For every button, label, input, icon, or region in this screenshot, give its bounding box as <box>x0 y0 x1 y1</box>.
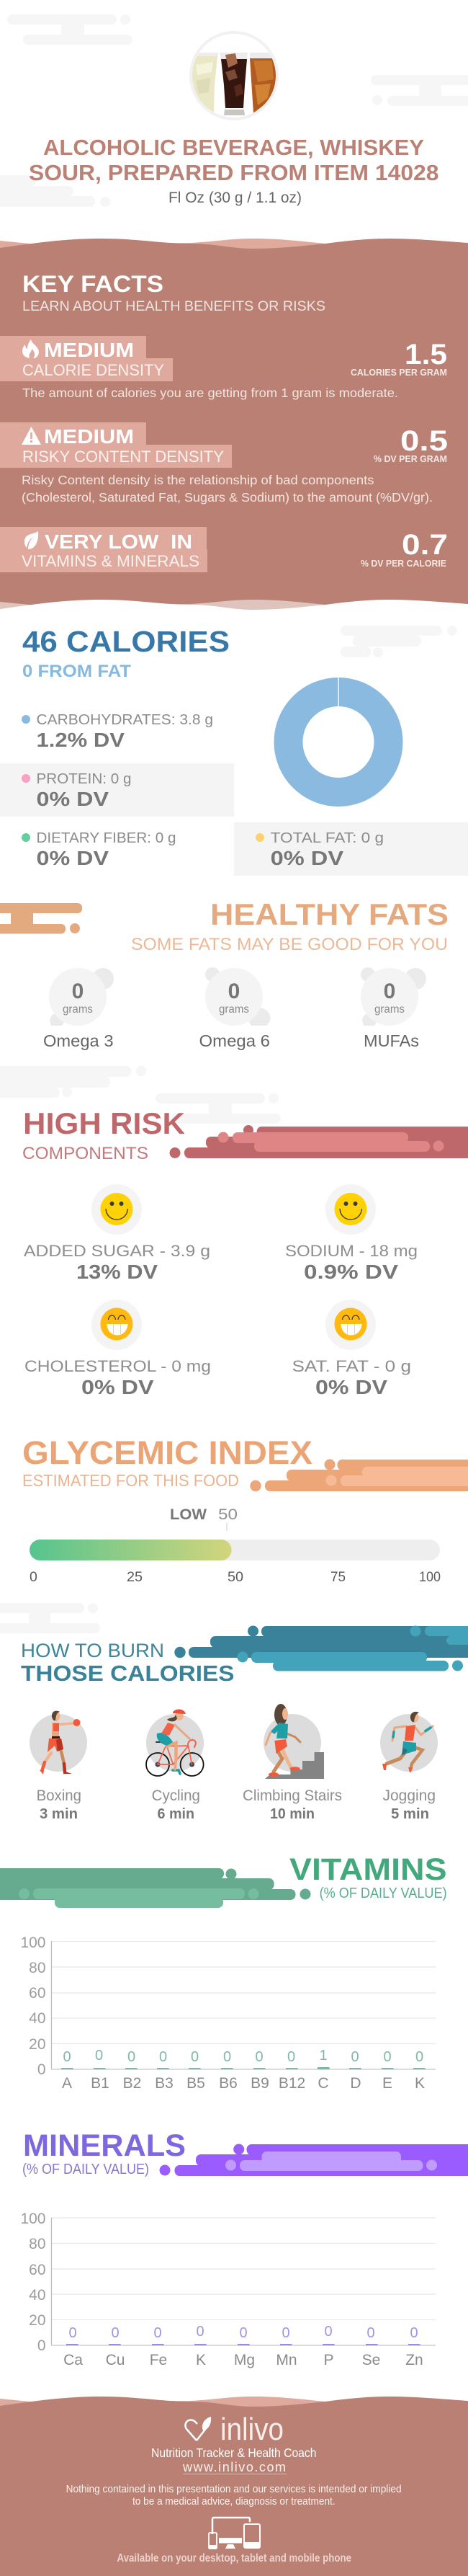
bar chart: vitamins: 100 <box>20 1935 46 1951</box>
heading: glycemic index: GLYCEMIC INDEX <box>22 1434 312 1471</box>
bar chart: vitamins: 60 <box>29 1985 46 2002</box>
subheading: components: COMPONENTS <box>22 1144 148 1163</box>
legend row backgrounds <box>0 763 468 876</box>
stat: omega 6 <box>199 967 270 1050</box>
bar chart: minerals: 0 <box>366 2325 375 2341</box>
disclaimer: Nothing contained in this presentation and our services is intended or implied <box>66 2484 402 2495</box>
gauge label: LOW <box>170 1506 207 1523</box>
bar chart: minerals: P <box>323 2352 334 2368</box>
donut chart <box>288 677 389 792</box>
availability note: Available on your desktop, tablet and mobile phone <box>117 2552 351 2564</box>
food photo: three glasses in a circle <box>190 32 279 119</box>
icon: grinning face <box>334 1307 367 1341</box>
brand name: inlivo <box>220 2412 284 2447</box>
logo: heart and leaf <box>185 2417 211 2440</box>
serving size: Fl Oz (30 g / 1.1 oz) <box>168 190 302 206</box>
stat: mufas: 0 <box>384 980 395 1003</box>
panel: vitamins <box>0 1852 447 2092</box>
icon: smiley <box>334 1193 367 1225</box>
bar chart: vitamins: B12 <box>279 2075 305 2092</box>
stat: mufas: grams <box>374 1003 405 1016</box>
bar chart: vitamins: B5 <box>186 2075 205 2092</box>
stat: carbohydrates: 1.2% DV <box>36 729 125 751</box>
stat: protein: PROTEIN: 0 g <box>36 770 131 787</box>
bar chart: minerals: 100 <box>20 2211 46 2227</box>
risk item: sodium <box>285 1184 418 1283</box>
subheading: calories from fat: 0 FROM FAT <box>22 662 131 681</box>
activity: cycling: 6 min <box>157 1806 194 1822</box>
icon: smiley <box>101 1193 132 1225</box>
bar chart: vitamins: 80 <box>29 1960 46 1976</box>
stat: omega 6: grams <box>219 1003 249 1016</box>
fact: risky content density: MEDIUM <box>44 425 134 448</box>
activity: boxing: Boxing <box>37 1787 81 1804</box>
bar chart: minerals: Se <box>362 2352 380 2368</box>
icon: stairs and climber <box>265 1704 324 1779</box>
heading: minerals: MINERALS <box>23 2128 186 2163</box>
bar chart: minerals: 0 <box>282 2325 290 2341</box>
bar chart: vitamins: 0 <box>223 2049 231 2065</box>
fact: calorie density: 1.5 <box>405 339 447 370</box>
decoration: red bars <box>170 1125 468 1158</box>
bar chart: vitamins: 0 <box>37 2061 46 2078</box>
bar chart: minerals: 40 <box>29 2287 46 2304</box>
fact: vitamins and minerals: % DV PER CALORIE <box>361 559 446 569</box>
icon: cyclist <box>146 1710 204 1776</box>
fact: calorie density <box>0 336 447 400</box>
icon: grinning face <box>101 1307 132 1341</box>
tagline: Nutrition Tracker & Health Coach <box>151 2446 317 2460</box>
stat: total fat: TOTAL FAT: 0 g <box>271 830 384 846</box>
bar chart: minerals: 0 <box>153 2325 162 2341</box>
bar chart: vitamins: 0 <box>127 2049 135 2065</box>
risk item: cholesterol: 0% DV <box>81 1376 154 1398</box>
bar chart: minerals: Mg <box>234 2352 255 2368</box>
bar chart: minerals: Cu <box>106 2352 125 2368</box>
bar chart: minerals: 0 <box>410 2325 418 2341</box>
heading: calories: 46 CALORIES <box>22 625 230 658</box>
bar chart: vitamins: 20 <box>29 2036 46 2053</box>
fact: vitamins and minerals: VERY LOW IN <box>45 530 192 553</box>
risk item: cholesterol: CHOLESTEROL - 0 mg <box>24 1357 211 1375</box>
heading: how to burn: HOW TO BURN <box>21 1640 164 1661</box>
panel: footer <box>0 2397 468 2576</box>
title <box>29 136 439 185</box>
bar chart: vitamins: C <box>318 2075 329 2092</box>
risk item: added sugar: 13% DV <box>76 1261 158 1283</box>
decoration: orange bars <box>250 1459 468 1491</box>
bar chart: vitamins: 0 <box>63 2049 71 2065</box>
panel: healthy fats <box>0 897 449 1050</box>
disclaimer: to be a medical advice, diagnosis or treatment. <box>132 2496 336 2508</box>
activity: climbing stairs <box>243 1704 342 1822</box>
bar chart: vitamins: B1 <box>91 2075 109 2092</box>
fact: risky content density: (Cholesterol, Saturated Fat, Sugars & Sodium) to the amount (%DV/gr). <box>22 490 433 505</box>
bar chart: vitamins: B9 <box>251 2075 269 2092</box>
bar chart: minerals: Zn <box>405 2352 423 2368</box>
bar chart: minerals: 0 <box>196 2324 204 2340</box>
bar chart: minerals: 0 <box>68 2325 77 2341</box>
bar chart: vitamins: 0 <box>255 2049 264 2065</box>
bar chart: vitamins: A <box>62 2075 72 2092</box>
heading: healthy fats: HEALTHY FATS <box>210 897 449 931</box>
stat: mufas <box>361 967 426 1050</box>
gauge bar <box>30 1540 440 1560</box>
risk item: saturated fat: SAT. FAT - 0 g <box>292 1357 411 1375</box>
bar chart: vitamins: E <box>382 2075 392 2092</box>
stat: omega 6: Omega 6 <box>199 1031 270 1050</box>
heading: high risk: HIGH RISK <box>23 1106 185 1140</box>
bar chart: minerals: 20 <box>29 2312 46 2329</box>
decoration: orange bars <box>0 903 82 934</box>
activity: cycling: Cycling <box>152 1787 200 1804</box>
subheading: minerals: (% OF DAILY VALUE) <box>22 2161 149 2177</box>
activity: boxing: 3 min <box>40 1806 78 1822</box>
bar chart: minerals: 0 <box>324 2324 333 2340</box>
fact: risky content density: 0.5 <box>400 425 448 457</box>
bar chart: vitamins: 0 <box>287 2049 295 2065</box>
icon: jogger <box>382 1712 433 1773</box>
gauge label: 50 <box>218 1506 238 1523</box>
bar chart: vitamins: B6 <box>219 2075 238 2092</box>
bar chart: minerals: K <box>196 2352 206 2368</box>
activity: jogging: 5 min <box>391 1806 429 1822</box>
gauge scale: 100 <box>419 1569 441 1585</box>
fact: vitamins and minerals: 0.7 <box>402 529 448 561</box>
stat: dietary fiber: DIETARY FIBER: 0 g <box>36 830 176 846</box>
activity: cycling <box>146 1710 204 1822</box>
bar chart: vitamins: 0 <box>191 2049 199 2065</box>
fact: calorie density: CALORIES PER GRAM <box>351 368 447 378</box>
heading: key facts: KEY FACTS <box>22 271 163 297</box>
fact: risky content density <box>0 422 448 505</box>
stat: omega 3 <box>43 968 114 1050</box>
bar chart: vitamins: 0 <box>159 2049 167 2065</box>
stat: omega 3: 0 <box>72 980 84 1003</box>
title: SOUR, PREPARED FROM ITEM 14028 <box>29 161 439 185</box>
fact: calorie density: CALORIE DENSITY <box>22 361 164 379</box>
panel: minerals <box>20 2128 468 2368</box>
bar chart: minerals: 60 <box>29 2262 46 2278</box>
heading: those calories: THOSE CALORIES <box>21 1661 235 1686</box>
risk item: sodium: 0.9% DV <box>304 1261 398 1283</box>
activity: climbing stairs: Climbing Stairs <box>243 1787 342 1804</box>
risk item: saturated fat: 0% DV <box>315 1376 387 1398</box>
gauge label <box>170 1506 238 1531</box>
panel: key facts <box>0 239 468 621</box>
subheading: vitamins: (% OF DAILY VALUE) <box>320 1885 447 1901</box>
gauge scale: 0 <box>30 1569 37 1585</box>
activity: jogging <box>380 1712 438 1822</box>
fact: calorie density: MEDIUM <box>44 339 134 361</box>
risk item: added sugar: ADDED SUGAR - 3.9 g <box>24 1242 210 1260</box>
bar chart: vitamins: 0 <box>383 2049 392 2065</box>
stat: protein: 0% DV <box>36 788 109 810</box>
bar chart: minerals: 0 <box>111 2325 120 2341</box>
gauge scale: 75 <box>330 1569 346 1585</box>
bar chart: vitamins: 0 <box>351 2049 359 2065</box>
fact: risky content density: RISKY CONTENT DENSITY <box>22 448 224 466</box>
bar chart: vitamins: D <box>350 2075 361 2092</box>
icon: flame <box>22 339 39 358</box>
subheading: key facts: LEARN ABOUT HEALTH BENEFITS OR RISKS <box>22 298 325 314</box>
bar chart: minerals: Ca <box>63 2352 83 2368</box>
icon: warning triangle <box>22 427 41 445</box>
title: ALCOHOLIC BEVERAGE, WHISKEY <box>43 136 424 160</box>
bar chart: vitamins: B3 <box>155 2075 174 2092</box>
panel: high risk components <box>22 1106 468 1398</box>
bar chart: vitamins: 0 <box>415 2049 423 2065</box>
bar chart: minerals: 0 <box>239 2325 248 2341</box>
subheading: glycemic index: ESTIMATED FOR THIS FOOD <box>22 1471 239 1490</box>
risk item: saturated fat <box>292 1300 411 1398</box>
heading: vitamins: VITAMINS <box>289 1852 447 1887</box>
bar chart: minerals: Fe <box>150 2352 167 2368</box>
stat: carbohydrates: CARBOHYDRATES: 3.8 g <box>36 711 213 728</box>
stat: protein <box>22 770 131 810</box>
gauge scale <box>30 1569 441 1585</box>
decoration: green bars <box>0 1868 311 1908</box>
risk item: sodium: SODIUM - 18 mg <box>285 1242 418 1260</box>
gauge scale: 25 <box>127 1569 143 1585</box>
stat: omega 3: grams <box>63 1003 93 1016</box>
activity: jogging: Jogging <box>383 1787 436 1804</box>
bar chart: minerals: 80 <box>29 2236 46 2252</box>
icon: desktop, tablet and phone <box>209 2518 260 2549</box>
stat: mufas: MUFAs <box>364 1031 419 1050</box>
stat: total fat <box>256 830 384 869</box>
stat: omega 3: Omega 3 <box>43 1031 114 1050</box>
stat: total fat: 0% DV <box>271 847 343 869</box>
stat: omega 6: 0 <box>228 980 240 1003</box>
bar chart: vitamins <box>20 1935 436 2092</box>
bar chart: minerals: 0 <box>37 2337 46 2354</box>
stat: carbohydrates <box>22 711 213 751</box>
subheading: healthy fats: SOME FATS MAY BE GOOD FOR YOU <box>131 935 448 954</box>
decoration: purple bars <box>160 2144 468 2176</box>
activity: boxing <box>30 1711 87 1822</box>
bar chart: vitamins: 0 <box>95 2048 103 2064</box>
disclaimer <box>66 2484 402 2508</box>
panel: how to burn those calories <box>21 1626 468 1822</box>
activity: climbing stairs: 10 min <box>270 1806 315 1822</box>
gauge scale: 50 <box>228 1569 243 1585</box>
bar chart: minerals: Mn <box>276 2352 297 2368</box>
risk item: cholesterol <box>24 1300 211 1398</box>
fact: risky content density: % DV PER GRAM <box>374 454 447 464</box>
bar chart: vitamins: B2 <box>123 2075 141 2092</box>
stat: dietary fiber: 0% DV <box>36 847 109 869</box>
panel: glycemic index <box>22 1434 468 1585</box>
fact: vitamins and minerals: VITAMINS & MINERALS <box>22 552 199 570</box>
bar chart: minerals <box>20 2211 436 2368</box>
stat: dietary fiber <box>22 830 176 869</box>
decoration: teal bars <box>174 1626 468 1671</box>
bar chart: vitamins: K <box>415 2075 425 2092</box>
website link: www.inlivo.com <box>182 2460 286 2474</box>
icon: leaf <box>24 531 38 549</box>
panel: calories <box>0 625 468 876</box>
bar chart: vitamins: 40 <box>29 2010 46 2027</box>
fact: risky content density: Risky Content density is the relationship of bad components <box>22 473 374 487</box>
fact: calorie density: The amount of calories you are getting from 1 gram is moderate. <box>22 386 398 400</box>
bar chart: vitamins: 1 <box>319 2048 328 2064</box>
icon: boxer <box>40 1711 81 1775</box>
risk item: added sugar <box>24 1184 210 1283</box>
fact: vitamins and minerals <box>0 527 448 572</box>
